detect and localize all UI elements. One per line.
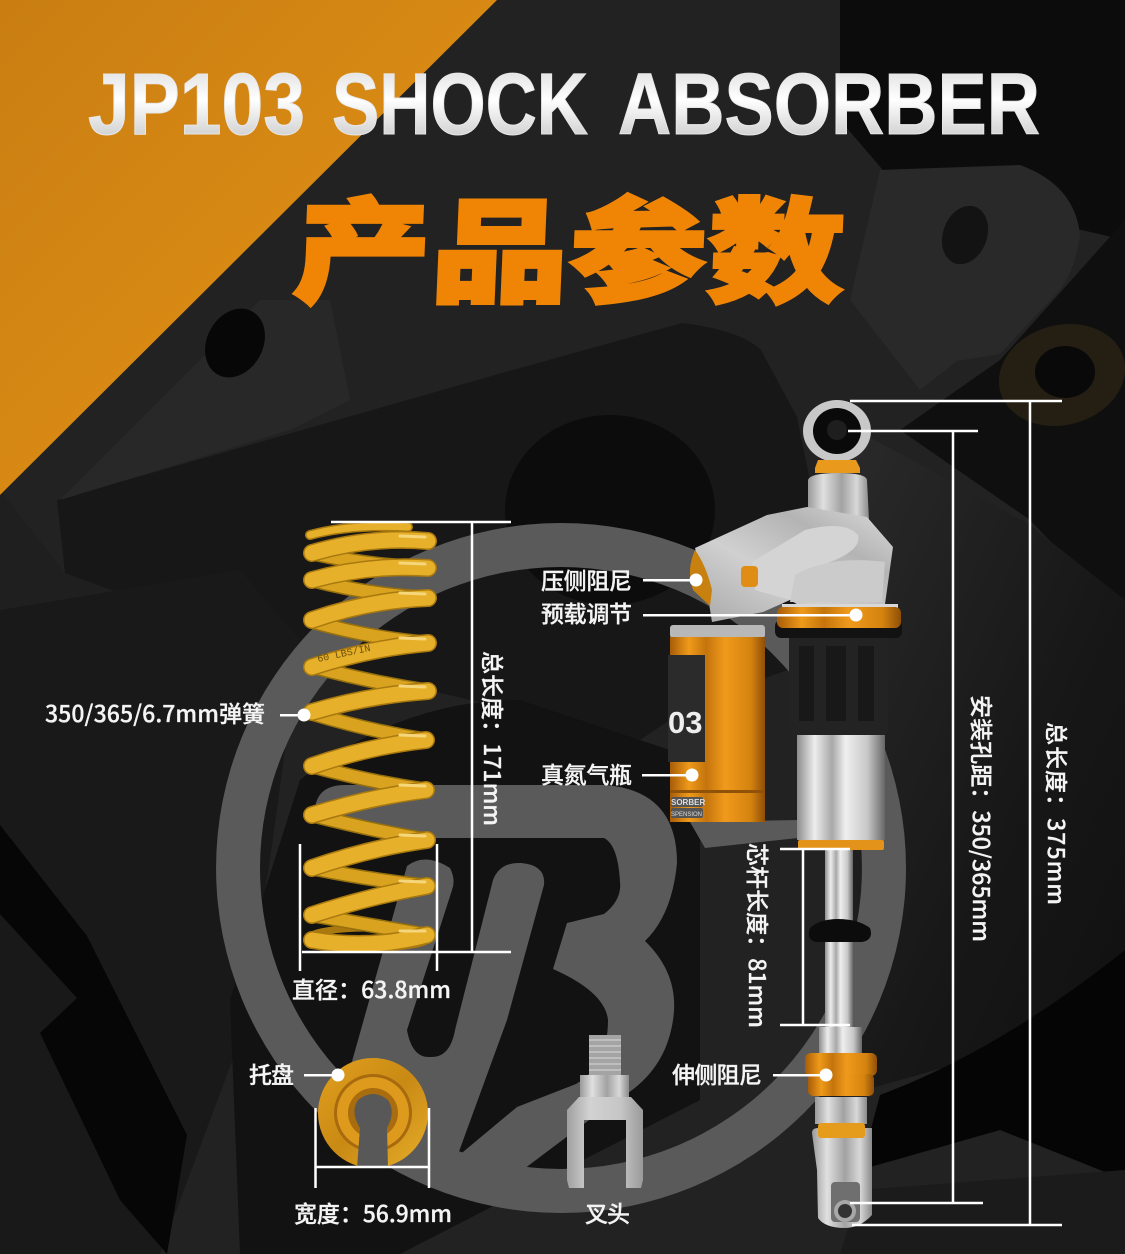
spring seat washer	[318, 1058, 428, 1168]
label: fork: 叉头	[585, 1195, 630, 1229]
dimension: seat width: 宽度：56.9mm	[294, 1195, 452, 1229]
shock absorber: reservoir: SORBER	[671, 798, 705, 807]
title: english: JP103	[88, 56, 305, 153]
fork end	[567, 1035, 643, 1188]
orange corner triangle	[0, 0, 497, 495]
dimension: spring diameter	[292, 844, 451, 1005]
label: nitrogen bottle	[541, 756, 698, 790]
shock absorber: shaft and bumper	[809, 850, 871, 1030]
dimension: total length: 总长度：375mm	[1041, 722, 1075, 905]
label: preload adjust: 预载调节	[541, 595, 632, 629]
dimension: shaft length	[742, 843, 850, 1028]
dimension: spring length: 总长度：171mm	[477, 651, 511, 826]
label: spring seat	[249, 1056, 344, 1090]
title: english: ABSORBER	[618, 56, 1040, 153]
label: rebound damping	[672, 1056, 832, 1090]
dimension: shaft length: 芯杆长度：81mm	[742, 843, 776, 1028]
shock absorber: head casting	[690, 473, 893, 622]
label: compression damping	[541, 562, 702, 596]
dimension: total length	[850, 401, 1075, 1225]
label: spring spec: 350/365/6.7mm弹簧	[45, 695, 265, 729]
dimension: mounting distance: 安装孔距：350/365mm	[966, 695, 1000, 942]
shock absorber: reservoir: 03	[668, 705, 702, 740]
shock absorber: top eye	[803, 400, 871, 473]
label: spring seat: 托盘	[249, 1056, 294, 1090]
shock absorber: rebound adjuster and clevis	[805, 1027, 877, 1228]
spring: 60 LBS/IN	[316, 643, 372, 666]
label: nitrogen bottle: 真氮气瓶	[541, 756, 632, 790]
dimension: seat width	[294, 1108, 452, 1229]
dimension: spring diameter: 直径：63.8mm	[292, 971, 451, 1005]
shock absorber: preload collar, black sleeve, lower cylinder	[775, 604, 902, 850]
title: english	[88, 56, 1040, 153]
shock absorber: reservoir	[668, 625, 765, 822]
dimension: spring length	[302, 522, 511, 952]
spring	[309, 526, 429, 948]
title: chinese: 产品参数	[291, 162, 850, 326]
label: preload adjust	[541, 595, 862, 629]
title: english: SHOCK	[332, 56, 588, 153]
watermark logo	[216, 523, 906, 1213]
label: rebound damping: 伸侧阻尼	[672, 1056, 762, 1090]
shock absorber: reservoir: SPENSION	[671, 812, 702, 818]
dimension: mounting distance	[848, 431, 1000, 1203]
label: compression damping: 压侧阻尼	[541, 562, 632, 596]
